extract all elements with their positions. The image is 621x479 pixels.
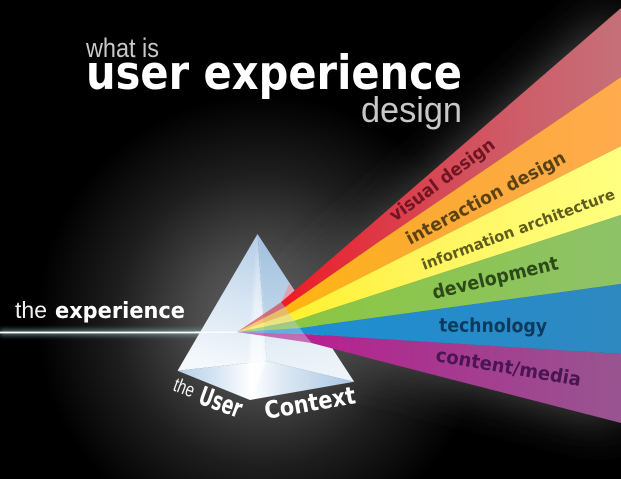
label: development: development [430, 252, 561, 304]
ray: development [294, 215, 621, 328]
beam glow inside prism [195, 331, 237, 333]
label: the User [170, 374, 246, 425]
ray: interaction design [285, 77, 621, 314]
faint red reflection [281, 284, 294, 307]
label: interaction design: interaction design [402, 147, 570, 249]
label: Context: Context [262, 381, 358, 425]
label: information architecture: information architecture [419, 185, 617, 274]
label: the experience: experience [55, 299, 185, 324]
label: technology: technology [439, 315, 548, 337]
spectrum rays [281, 8, 621, 423]
title line: user experience: user experience [86, 46, 462, 101]
label: the User: the [170, 374, 198, 402]
label: content/media: content/media [434, 344, 583, 391]
prism [178, 234, 354, 400]
label: the experience [15, 297, 185, 324]
ray: information architecture [289, 146, 621, 321]
refracted spectrum inside prism [237, 284, 312, 343]
ray labels [385, 134, 617, 391]
prism left face [178, 234, 267, 371]
prism light ridge [248, 256, 267, 364]
title line: design: design [361, 89, 462, 130]
label: the User: User [195, 381, 246, 425]
incoming light beam [0, 329, 240, 336]
label: the experience: the [15, 297, 47, 323]
label: visual design: visual design [385, 134, 499, 226]
ray: content/media [304, 334, 621, 423]
prism right face [258, 234, 354, 382]
title line: what is: what is [85, 33, 159, 63]
ray: technology [300, 284, 621, 354]
ray: visual design [281, 8, 621, 307]
title [85, 33, 462, 130]
prism base [178, 361, 354, 400]
